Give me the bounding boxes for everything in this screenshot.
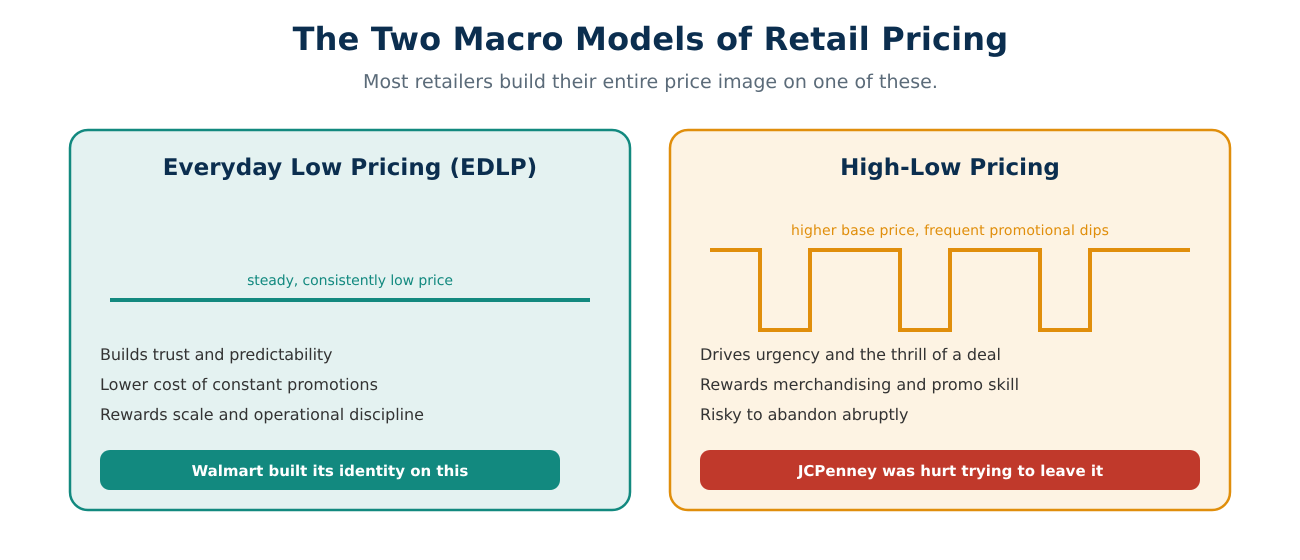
subtitle: Most retailers build their entire price image on one of these. [363,71,938,93]
benefits list: Lower cost of constant promotions [100,375,378,394]
callout: Walmart [100,450,560,490]
panel: everyday low pricing [70,130,630,510]
line chart: promotional dips [710,250,1190,330]
benefits list: Builds trust and predictability [100,345,332,364]
benefits list: Rewards scale and operational discipline [100,405,424,424]
panel: high-low pricing [670,130,1230,510]
benefits list [100,345,424,424]
panel heading: Everyday Low Pricing (EDLP) [163,155,537,181]
benefits list: Drives urgency and the thrill of a deal [700,345,1001,364]
callout: Walmart: Walmart built its identity on this [192,462,468,480]
panel background [70,130,630,510]
benefits list: Risky to abandon abruptly [700,405,908,424]
callout: JCPenney: JCPenney was hurt trying to leave it [797,462,1103,480]
callout: JCPenney [700,450,1200,490]
panel background [670,130,1230,510]
chart label: steady, consistently low price [247,273,453,289]
title: The Two Macro Models of Retail Pricing [293,20,1008,58]
benefits list: Rewards merchandising and promo skill [700,375,1019,394]
panel heading: High-Low Pricing [840,155,1060,181]
benefits list [700,345,1019,424]
chart label: higher base price, frequent promotional dips [791,223,1109,239]
line chart: steady price [110,298,590,302]
